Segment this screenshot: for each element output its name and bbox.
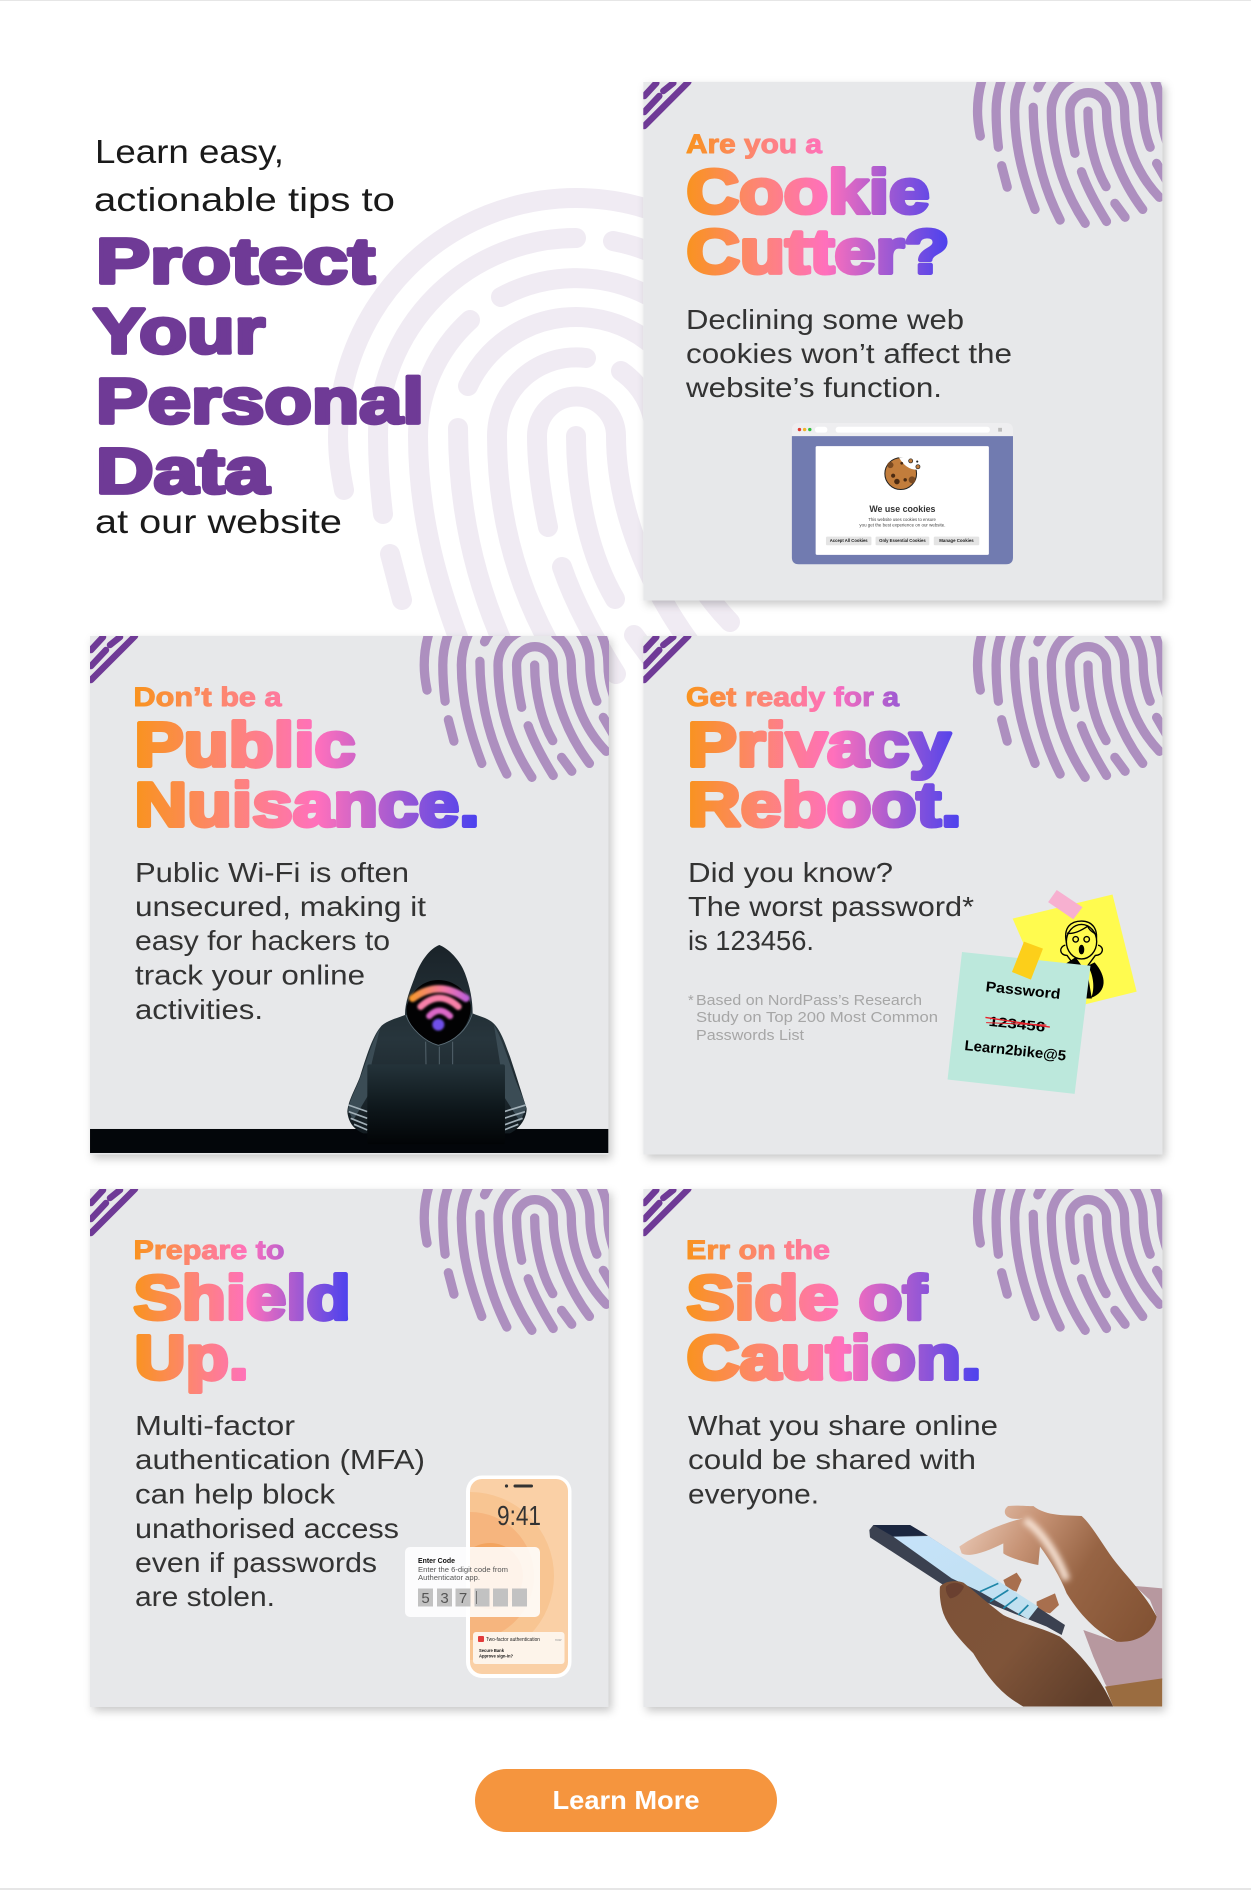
title block: [93, 133, 424, 540]
panel: privacy reboot: [642, 636, 1170, 1163]
heading: public nuisance: Nuisance.: [134, 771, 480, 840]
body text: wifi: activities.: [135, 994, 263, 1025]
illustration: hands holding smartphone: [869, 1506, 1162, 1707]
heading: side of caution: Err on the: [686, 1235, 830, 1265]
heading: side of caution: Caution.: [686, 1324, 982, 1393]
body text: password: [688, 857, 974, 956]
body text: sharing: What you share online: [688, 1410, 998, 1441]
illustration: phone with MFA prompt: 3: [440, 1590, 449, 1607]
heading: privacy reboot: Privacy: [688, 711, 951, 780]
illustration: phone with MFA prompt: Enter the 6-digit code from: [418, 1567, 508, 1574]
body text: MFA: even if passwords: [135, 1547, 377, 1578]
heading: privacy reboot: Reboot.: [688, 771, 962, 840]
title block: Learn easy,: [95, 133, 284, 170]
illustration: phone with MFA prompt: 7: [459, 1590, 467, 1607]
body text: sharing: could be shared with: [688, 1444, 976, 1475]
body text: wifi: easy for hackers to: [135, 925, 390, 956]
illustration: phone with MFA prompt: Two-factor authentication: [486, 1637, 540, 1643]
body text: password: Did you know?: [688, 857, 893, 888]
background fingerprint: [338, 198, 830, 678]
panel: side of caution: [642, 1188, 1170, 1716]
body text: cookies: Declining some web: [686, 304, 964, 335]
body text: wifi: [135, 857, 426, 1025]
title block: at our website: [95, 503, 342, 540]
footnote: Study on Top 200 Most Common: [696, 1010, 938, 1026]
heading: privacy reboot: [686, 682, 962, 840]
title block: actionable tips to: [94, 181, 395, 218]
heading: public nuisance: Don’t be a: [134, 682, 283, 712]
illustration: phone with MFA prompt: [405, 1476, 572, 1678]
body text: cookies: cookies won’t affect the: [686, 338, 1012, 369]
illustration: cookie consent browser window: We use cookies: [869, 504, 936, 514]
body text: MFA: can help block: [135, 1478, 335, 1510]
illustration: cookie consent browser window: [792, 423, 1013, 564]
heading: cookie cutter: Cookie: [686, 158, 930, 227]
heading: shield up: Shield: [134, 1264, 350, 1333]
title block: Personal: [96, 365, 424, 437]
illustration: cookie consent browser window: you get the best experience on our website.: [859, 522, 945, 527]
button: learn more: [475, 1769, 777, 1832]
illustration: cookie consent browser window: Only Essential Cookies: [879, 538, 926, 543]
body text: password: The worst password*: [688, 891, 974, 922]
title block: Your: [93, 295, 265, 367]
heading: cookie cutter: Cutter?: [686, 218, 950, 287]
body text: MFA: authentication (MFA): [135, 1444, 425, 1475]
illustration: phone with MFA prompt: now: [555, 1638, 562, 1642]
heading: public nuisance: [134, 682, 480, 840]
footnote: [688, 993, 938, 1044]
body text: wifi: track your online: [135, 960, 365, 990]
heading: shield up: Prepare to: [134, 1235, 284, 1265]
illustration: phone with MFA prompt: Authenticator app.: [418, 1575, 480, 1582]
illustration: sticky notes: Learn2bike@5: [964, 1038, 1067, 1065]
illustration: phone with MFA prompt: Enter Code: [418, 1556, 455, 1565]
heading: shield up: Up.: [134, 1324, 248, 1393]
illustration: sticky notes: 123456: [988, 1014, 1046, 1035]
body text: cookies: website’s function.: [685, 372, 942, 403]
illustration: sticky notes: Password: [985, 979, 1061, 1003]
body text: MFA: are stolen.: [135, 1581, 275, 1612]
heading: side of caution: [686, 1235, 982, 1393]
body text: MFA: [135, 1410, 425, 1612]
body text: password: is 123456.: [688, 925, 814, 956]
footnote: Based on NordPass’s Research: [696, 993, 922, 1009]
illustration: cookie consent browser window: This website uses cookies to ensure: [868, 517, 937, 522]
illustration: sticky notes: [948, 890, 1137, 1094]
heading: cookie cutter: Are you a: [686, 129, 823, 159]
illustration: hooded hacker with laptop: [90, 945, 608, 1153]
panel: public nuisance: [88, 636, 616, 1163]
footnote: *: [688, 993, 694, 1009]
icon: wifi glow: [413, 989, 466, 1028]
body text: sharing: everyone.: [688, 1478, 819, 1510]
illustration: phone with MFA prompt: Approve sign-in?: [479, 1654, 513, 1658]
panel: shield up: [88, 1188, 616, 1716]
heading: cookie cutter: [686, 129, 950, 287]
heading: public nuisance: Public: [134, 711, 356, 780]
illustration: phone with MFA prompt: 5: [421, 1590, 430, 1607]
panel: cookie cutter: [642, 82, 1170, 609]
title block: Protect: [96, 225, 375, 297]
illustration: phone with MFA prompt: Secure Bank: [479, 1648, 504, 1653]
body text: wifi: unsecured, making it: [135, 891, 426, 922]
title block: Data: [96, 435, 270, 507]
body text: MFA: unathorised access: [135, 1513, 399, 1544]
button: learn more: Learn More: [552, 1785, 700, 1815]
footnote: Passwords List: [696, 1028, 804, 1044]
body text: wifi: Public Wi-Fi is often: [135, 857, 409, 888]
illustration: cookie consent browser window: Accept All Cookies: [830, 538, 868, 543]
heading: side of caution: Side of: [686, 1264, 927, 1333]
body text: MFA: Multi-factor: [135, 1410, 295, 1441]
body text: cookies: [685, 304, 1012, 403]
heading: privacy reboot: Get ready for a: [686, 682, 900, 712]
illustration: phone with MFA prompt: 9:41: [497, 1500, 541, 1531]
illustration: cookie consent browser window: Manage Cookies: [939, 538, 974, 543]
body text: sharing: [688, 1410, 998, 1510]
heading: shield up: [134, 1235, 350, 1393]
